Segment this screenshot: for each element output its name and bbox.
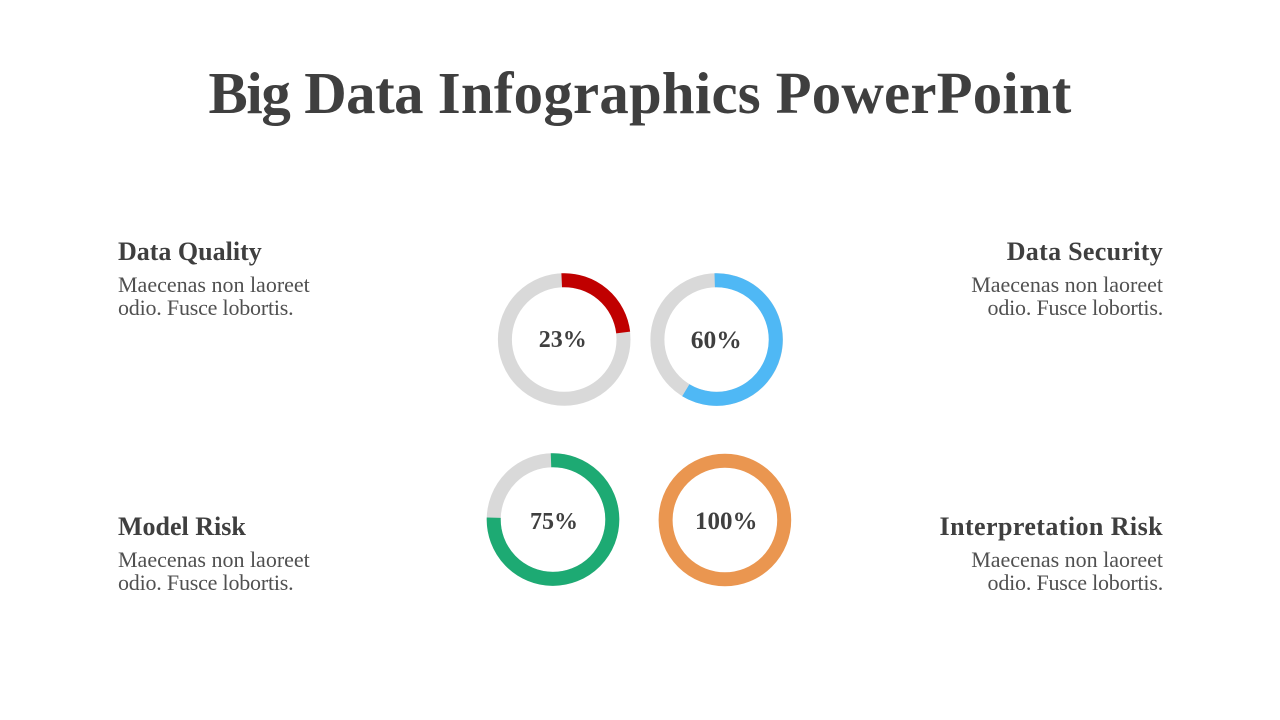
donut: 60%: 60% xyxy=(691,325,742,354)
donut: 100%: 100% xyxy=(695,508,758,535)
heading: model risk: Model Risk xyxy=(118,512,246,541)
heading: data security: Data Security xyxy=(1007,237,1163,266)
text: model risk description xyxy=(118,547,310,595)
heading: interpretation risk: Interpretation Risk xyxy=(940,512,1163,541)
donut: 75%: 75% xyxy=(530,509,578,535)
heading: data quality: Data Quality xyxy=(118,237,262,266)
title: Big Data Infographics PowerPoint xyxy=(208,61,1072,126)
text: model risk description: Maecenas non laoreet xyxy=(118,547,310,572)
donut: 60% xyxy=(657,280,776,399)
donut: 100% xyxy=(666,461,784,579)
text: model risk description: odio. Fusce lobortis. xyxy=(118,570,293,595)
text: data security description xyxy=(971,272,1163,320)
text: data quality description: Maecenas non laoreet xyxy=(118,272,310,297)
text: interpretation risk description: Maecenas non laoreet xyxy=(971,547,1163,572)
text: interpretation risk description: odio. Fusce lobortis. xyxy=(988,570,1163,595)
text: data security description: odio. Fusce lobortis. xyxy=(988,295,1163,320)
panel: data quality xyxy=(118,237,310,320)
donut: 23%: 23% xyxy=(539,327,587,353)
text: data quality description: odio. Fusce lobortis. xyxy=(118,295,293,320)
text: interpretation risk description xyxy=(971,547,1163,595)
panel: data security xyxy=(971,237,1163,320)
text: data security description: Maecenas non laoreet xyxy=(971,272,1163,297)
donut: 75% xyxy=(494,460,612,579)
text: data quality description xyxy=(118,272,310,320)
donut: 23% xyxy=(505,280,624,399)
panel: model risk xyxy=(118,512,310,595)
panel: interpretation risk xyxy=(940,512,1163,595)
